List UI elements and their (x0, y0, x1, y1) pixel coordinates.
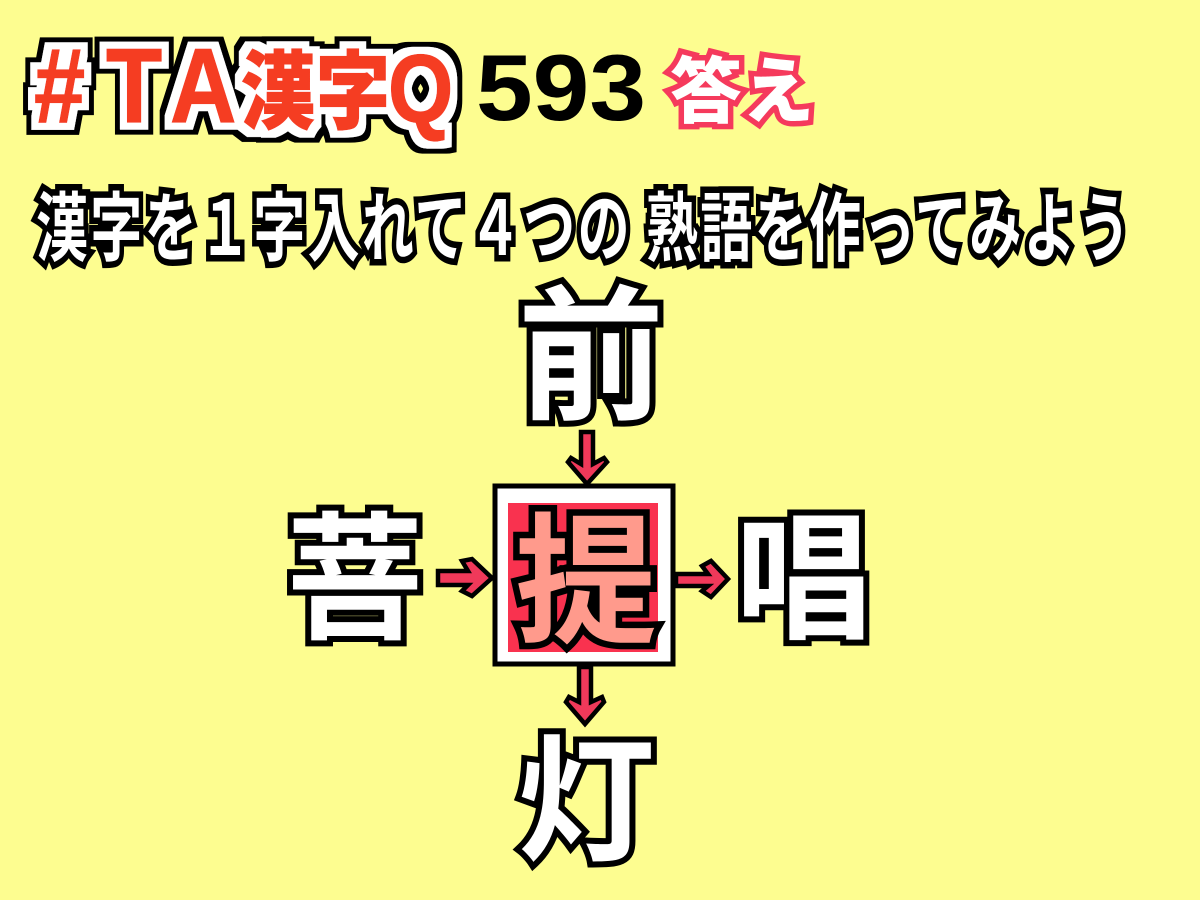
arrow: top to centre (568, 432, 607, 484)
kanji top: 前: 前 (518, 240, 664, 451)
kanji bottom: 灯: 灯 (517, 690, 655, 890)
instruction: 漢字を１字入れて４つの 熟語を作ってみよう (36, 168, 1130, 277)
arrow: centre to right (676, 561, 728, 597)
arrow: left to centre (438, 559, 492, 596)
answer highlight square (508, 503, 658, 652)
answer box (495, 467, 673, 673)
number 593: 593 (476, 35, 646, 140)
title: A (170, 27, 236, 145)
kanji left: 菩: 菩 (286, 468, 424, 668)
answer label: 答え (670, 33, 814, 138)
answer kanji: 提: 提 (515, 467, 657, 673)
title: 字 (316, 24, 390, 147)
title: # (34, 27, 85, 145)
title: Q (388, 36, 453, 143)
kanji right: 唱: 唱 (735, 468, 873, 668)
title: 漢 (241, 24, 315, 147)
arrow: centre to bottom (566, 667, 604, 724)
title: T (106, 27, 162, 145)
title (34, 24, 453, 147)
